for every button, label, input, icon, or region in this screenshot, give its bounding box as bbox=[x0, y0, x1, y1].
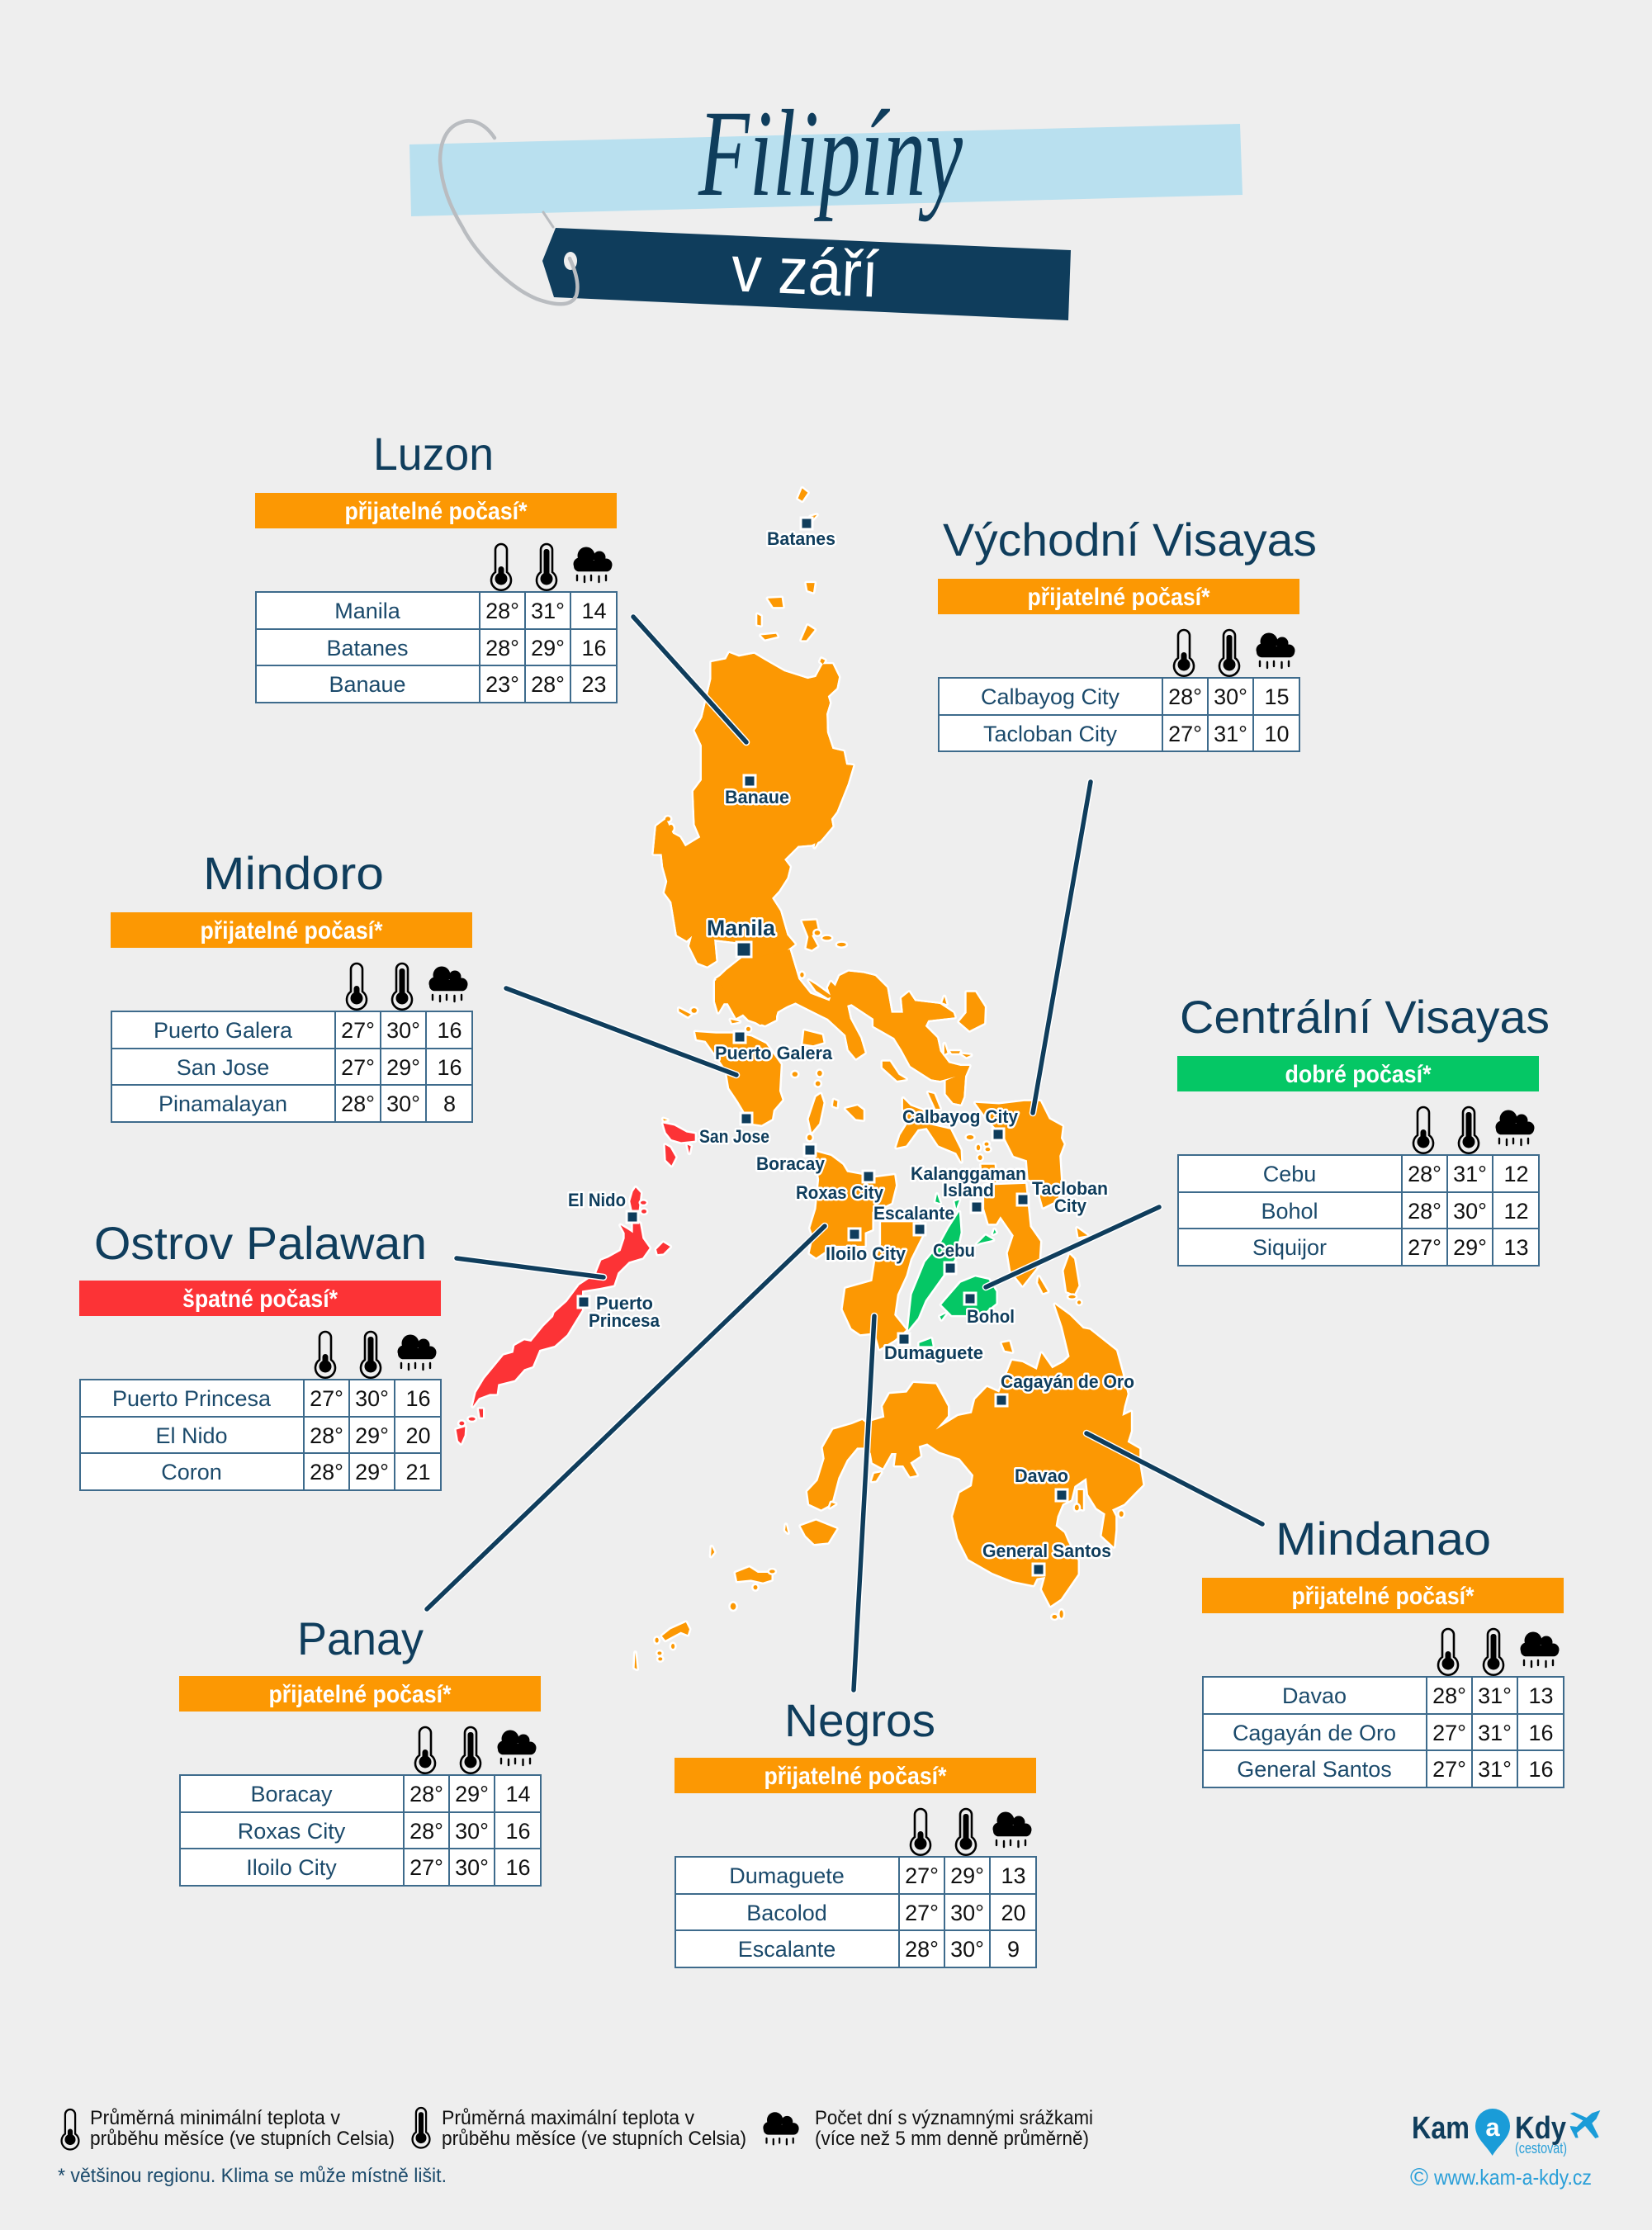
climate table: 30° bbox=[455, 1855, 489, 1880]
city labels: Bohol bbox=[967, 1306, 1015, 1327]
legend: minimum temperature bbox=[62, 2107, 395, 2150]
climate table: 29° bbox=[1453, 1235, 1487, 1260]
column icons bbox=[347, 963, 467, 1010]
climate table: 14 bbox=[581, 599, 607, 623]
climate table: 23 bbox=[581, 672, 607, 697]
city labels: San Jose bbox=[699, 1126, 769, 1147]
panel: Centrální Visayas bbox=[1177, 991, 1550, 1266]
leader: Mindoro bbox=[506, 988, 736, 1075]
title text: Filipíny bbox=[698, 85, 963, 222]
weather bar: dobré počasí* bbox=[1285, 1061, 1432, 1088]
map of the Philippines bbox=[457, 488, 1143, 1669]
city labels: Roxas City bbox=[796, 1182, 884, 1203]
column icons bbox=[1438, 1629, 1559, 1675]
climate table: Coron bbox=[161, 1460, 222, 1484]
weather bar: přijatelné počasí* bbox=[345, 498, 528, 525]
city labels: Princesa bbox=[589, 1310, 660, 1331]
climate table: 27° bbox=[1432, 1721, 1466, 1745]
column icons bbox=[1413, 1107, 1534, 1153]
panel: Panay bbox=[179, 1612, 541, 1886]
climate table bbox=[111, 1011, 472, 1122]
climate table bbox=[180, 1775, 541, 1886]
weather bar: přijatelné počasí* bbox=[269, 1681, 452, 1708]
city labels: Puerto bbox=[596, 1293, 653, 1314]
heading: Mindanao bbox=[1276, 1513, 1491, 1565]
climate table: 30° bbox=[1214, 684, 1247, 709]
climate table: 28° bbox=[341, 1091, 375, 1116]
climate table: 30° bbox=[1453, 1199, 1487, 1224]
climate table: Banaue bbox=[329, 672, 406, 697]
climate table: 20 bbox=[405, 1423, 431, 1448]
climate table: El Nido bbox=[155, 1423, 228, 1448]
climate table: Dumaguete bbox=[729, 1863, 845, 1888]
climate table: San Jose bbox=[177, 1055, 269, 1080]
logo: Kam a Kdy: (cestovat) bbox=[1515, 2140, 1567, 2157]
column icons bbox=[1174, 630, 1295, 676]
title banner bbox=[409, 124, 1243, 216]
weather bar bbox=[938, 579, 1299, 614]
title block bbox=[409, 85, 1243, 320]
climate table: 16 bbox=[437, 1018, 462, 1043]
heading: Východní Visayas bbox=[943, 514, 1317, 566]
climate table: Pinamalayan bbox=[159, 1091, 287, 1116]
climate table: 16 bbox=[437, 1055, 462, 1080]
panel: Mindanao bbox=[1202, 1513, 1564, 1787]
climate table: 20 bbox=[1001, 1901, 1026, 1925]
climate table: 29° bbox=[386, 1055, 420, 1080]
heading: Ostrov Palawan bbox=[94, 1217, 427, 1269]
climate table: 8 bbox=[443, 1091, 456, 1116]
climate table: 14 bbox=[505, 1782, 531, 1806]
climate table: 29° bbox=[355, 1423, 389, 1448]
climate table: Batanes bbox=[326, 636, 409, 660]
climate table: General Santos bbox=[1237, 1757, 1392, 1782]
climate table: 31° bbox=[531, 599, 565, 623]
column icons bbox=[415, 1727, 537, 1773]
heading: Panay bbox=[297, 1612, 424, 1664]
leader: Panay bbox=[427, 1226, 825, 1609]
climate table: 29° bbox=[355, 1460, 389, 1484]
climate table: 27° bbox=[905, 1863, 939, 1888]
city labels: Cebu bbox=[933, 1240, 975, 1261]
tag string loop bbox=[440, 121, 577, 304]
logo: Kam a Kdy: www.kam-a-kdy.cz bbox=[1433, 2165, 1592, 2190]
climate table: Tacloban City bbox=[983, 722, 1118, 746]
panel: Negros bbox=[675, 1694, 1036, 1967]
climate table: 28° bbox=[1408, 1162, 1441, 1186]
logo: Kam a Kdy bbox=[1410, 2109, 1600, 2191]
city labels: Dumaguete bbox=[884, 1342, 983, 1363]
climate table: Escalante bbox=[738, 1937, 835, 1962]
climate table: 28° bbox=[409, 1782, 443, 1806]
climate table: Cagayán de Oro bbox=[1233, 1721, 1396, 1745]
city labels: Calbayog City bbox=[902, 1106, 1019, 1127]
weather bar bbox=[111, 912, 472, 948]
subtitle: v září bbox=[730, 231, 880, 311]
climate table: 27° bbox=[905, 1901, 939, 1925]
land seam fill: southern Luzon bbox=[654, 653, 853, 1025]
leader: Palawan bbox=[457, 1258, 604, 1277]
climate table: 30° bbox=[355, 1386, 389, 1411]
leader: Mindanao bbox=[1086, 1433, 1262, 1524]
climate table: 31° bbox=[1478, 1721, 1512, 1745]
climate table: 29° bbox=[950, 1863, 984, 1888]
climate table: 30° bbox=[386, 1091, 420, 1116]
panel: Ostrov Palawan bbox=[79, 1217, 441, 1490]
climate table bbox=[675, 1857, 1036, 1967]
climate table: 28° bbox=[485, 599, 519, 623]
climate table: Boracay bbox=[250, 1782, 333, 1806]
city labels: Cagayán de Oro bbox=[1001, 1371, 1134, 1392]
leader lines bbox=[427, 617, 1262, 1690]
legend: maximum temperature bbox=[413, 2107, 746, 2150]
legend: maximum temperature: Průměrná maximální teplota v bbox=[442, 2107, 694, 2129]
climate table: Roxas City bbox=[238, 1819, 346, 1844]
land seam fill: Bicol junction bbox=[716, 949, 969, 1104]
column icons bbox=[315, 1332, 436, 1378]
climate table: Cebu bbox=[1263, 1162, 1316, 1186]
city labels: Kalanggaman bbox=[911, 1163, 1026, 1184]
climate table: Puerto Galera bbox=[154, 1018, 293, 1043]
climate table bbox=[1203, 1677, 1564, 1787]
city labels: El Nido bbox=[568, 1190, 626, 1210]
climate table: 12 bbox=[1503, 1199, 1529, 1224]
tag connector string bbox=[543, 212, 553, 227]
climate table: 16 bbox=[1528, 1757, 1554, 1782]
climate table: 27° bbox=[409, 1855, 443, 1880]
climate table: 28° bbox=[905, 1937, 939, 1962]
climate table: 30° bbox=[950, 1937, 984, 1962]
heading: Mindoro bbox=[203, 847, 384, 899]
climate table: Davao bbox=[1282, 1683, 1347, 1708]
icon: plane bbox=[1570, 2110, 1600, 2138]
climate table bbox=[939, 678, 1299, 751]
heading: Centrální Visayas bbox=[1180, 991, 1550, 1043]
heading: Luzon bbox=[373, 428, 494, 480]
climate table: Iloilo City bbox=[246, 1855, 337, 1880]
city labels: Manila bbox=[707, 916, 776, 940]
climate table: 27° bbox=[310, 1386, 343, 1411]
column icons bbox=[491, 544, 613, 590]
climate table: 30° bbox=[455, 1819, 489, 1844]
footnote: * většinou regionu. Klima se může místně lišit. bbox=[58, 2165, 447, 2187]
climate table: 13 bbox=[1001, 1863, 1026, 1888]
climate table: 29° bbox=[531, 636, 565, 660]
weather bar: přijatelné počasí* bbox=[1291, 1583, 1474, 1610]
legend: minimum temperature: Průměrná minimální teplota v bbox=[90, 2107, 340, 2129]
climate table: Siquijor bbox=[1252, 1235, 1327, 1260]
climate table: 28° bbox=[310, 1460, 343, 1484]
city labels: Escalante bbox=[873, 1203, 954, 1224]
climate table: 28° bbox=[310, 1423, 343, 1448]
climate table: 29° bbox=[455, 1782, 489, 1806]
city labels bbox=[568, 528, 1134, 1561]
climate table: 31° bbox=[1478, 1683, 1512, 1708]
climate table: 27° bbox=[341, 1018, 375, 1043]
city labels: Puerto Galera bbox=[715, 1043, 833, 1063]
panel: Mindoro bbox=[111, 847, 472, 1122]
heading: Negros bbox=[784, 1694, 935, 1746]
climate table: 13 bbox=[1503, 1235, 1529, 1260]
legend: minimum temperature: průběhu měsíce (ve stupních Celsia) bbox=[90, 2128, 395, 2150]
climate table: 28° bbox=[1168, 684, 1202, 709]
climate table: 16 bbox=[1528, 1721, 1554, 1745]
tag hole bbox=[564, 252, 577, 270]
climate table: 12 bbox=[1503, 1162, 1529, 1186]
islands: Luzon bbox=[654, 488, 853, 1025]
leader: Negros bbox=[854, 1316, 874, 1690]
column icons bbox=[911, 1809, 1032, 1855]
climate table bbox=[256, 592, 617, 703]
weather bar: špatné počasí* bbox=[182, 1285, 338, 1313]
logo: Kam a Kdy: Kdy bbox=[1515, 2111, 1566, 2146]
climate table: 13 bbox=[1528, 1683, 1554, 1708]
leader: Luzon bbox=[633, 617, 746, 742]
weather bar bbox=[179, 1676, 541, 1712]
climate table: 23° bbox=[485, 672, 519, 697]
city labels: Tacloban bbox=[1032, 1178, 1108, 1199]
weather bar bbox=[675, 1758, 1036, 1793]
city labels: Island bbox=[943, 1180, 994, 1200]
climate table: Calbayog City bbox=[981, 684, 1120, 709]
legend bbox=[58, 2107, 1093, 2187]
climate table: 28° bbox=[531, 672, 565, 697]
weather bar bbox=[79, 1281, 441, 1316]
climate table: 31° bbox=[1478, 1757, 1512, 1782]
city labels: City bbox=[1054, 1195, 1087, 1216]
islands: Palawan bbox=[457, 1119, 695, 1443]
leader: Centrální Visayas bbox=[986, 1207, 1159, 1287]
weather bar bbox=[1202, 1578, 1564, 1613]
leader: Východní Visayas bbox=[1033, 782, 1091, 1113]
icon: map pin bbox=[1475, 2109, 1510, 2156]
weather bar bbox=[255, 493, 617, 528]
climate table: Bohol bbox=[1261, 1199, 1318, 1224]
panel: Východní Visayas bbox=[938, 514, 1317, 751]
weather bar: přijatelné počasí* bbox=[200, 917, 383, 945]
climate table bbox=[1178, 1155, 1539, 1266]
climate table: 30° bbox=[950, 1901, 984, 1925]
city labels: Davao bbox=[1015, 1465, 1068, 1486]
legend: rain days: (více než 5 mm denně průměrně) bbox=[815, 2128, 1089, 2150]
islands: Mindanao bbox=[635, 1304, 1143, 1669]
weather bar bbox=[1177, 1056, 1539, 1091]
weather bar: přijatelné počasí* bbox=[1027, 584, 1210, 611]
climate table: 28° bbox=[1408, 1199, 1441, 1224]
legend: rain days bbox=[763, 2107, 1093, 2150]
weather bar: přijatelné počasí* bbox=[764, 1763, 947, 1790]
climate table: 31° bbox=[1214, 722, 1247, 746]
climate table: 28° bbox=[1432, 1683, 1466, 1708]
climate table: 16 bbox=[505, 1819, 531, 1844]
climate table: 16 bbox=[505, 1855, 531, 1880]
climate table: 15 bbox=[1264, 684, 1290, 709]
climate table: Puerto Princesa bbox=[112, 1386, 272, 1411]
city markers bbox=[578, 518, 1067, 1575]
climate table: 10 bbox=[1264, 722, 1290, 746]
climate table: 27° bbox=[341, 1055, 375, 1080]
climate table: Manila bbox=[334, 599, 401, 623]
logo: Kam a Kdy: Kam bbox=[1412, 2111, 1470, 2146]
legend: maximum temperature: průběhu měsíce (ve stupních Celsia) bbox=[442, 2128, 746, 2150]
climate table: 28° bbox=[485, 636, 519, 660]
climate table: 31° bbox=[1453, 1162, 1487, 1186]
climate table: 27° bbox=[1432, 1757, 1466, 1782]
climate table: 21 bbox=[405, 1460, 431, 1484]
climate table bbox=[80, 1380, 441, 1490]
climate table: 30° bbox=[386, 1018, 420, 1043]
islands: Bicol, Mindoro, Visayas bbox=[679, 949, 1087, 1352]
panel: Luzon bbox=[255, 428, 617, 703]
city labels: Boracay bbox=[756, 1153, 826, 1174]
legend: rain days: Počet dní s významnými srážkami bbox=[815, 2107, 1093, 2129]
climate table: 16 bbox=[581, 636, 607, 660]
city labels: Banaue bbox=[725, 787, 789, 807]
climate table: 27° bbox=[1408, 1235, 1441, 1260]
logo: Kam a Kdy: © bbox=[1410, 2164, 1428, 2191]
climate table: 28° bbox=[409, 1819, 443, 1844]
logo: Kam a Kdy: a bbox=[1485, 2113, 1500, 2142]
climate table: Bacolod bbox=[746, 1901, 827, 1925]
city labels: General Santos bbox=[982, 1541, 1111, 1561]
climate table: 9 bbox=[1007, 1937, 1020, 1962]
climate table: 16 bbox=[405, 1386, 431, 1411]
tag bbox=[542, 228, 1071, 320]
climate table: 27° bbox=[1168, 722, 1202, 746]
city labels: Batanes bbox=[767, 528, 835, 549]
city labels: Iloilo City bbox=[826, 1243, 906, 1264]
